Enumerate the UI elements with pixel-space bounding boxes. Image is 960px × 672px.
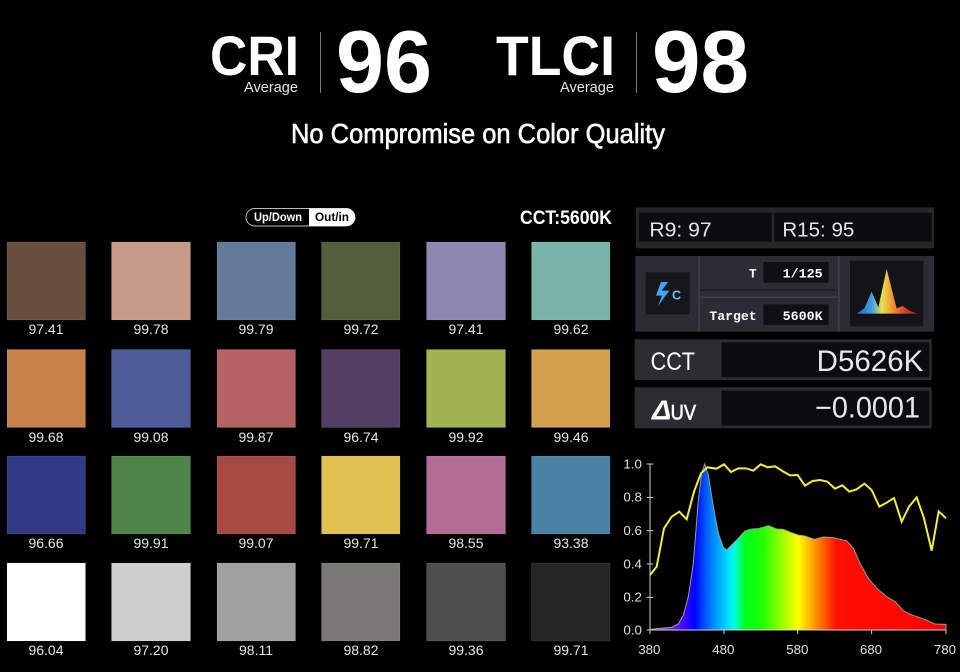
panel: delta uv reading: Δ — [651, 394, 671, 425]
value row 3: 99.07 — [238, 535, 274, 551]
shutter readout — [749, 262, 829, 283]
value row 2: 99.87 — [238, 429, 274, 445]
x axis labels: 480 — [712, 642, 734, 657]
panel: CCT reading — [635, 339, 932, 380]
value row 2: 99.46 — [553, 429, 589, 445]
swatch row 3 — [7, 456, 610, 534]
x axis labels: 380 — [638, 642, 660, 657]
target readout: Target — [709, 309, 757, 324]
value row 1: 99.78 — [133, 321, 169, 337]
panel: R9 and R15 readout — [636, 207, 934, 248]
CRI value: 96 — [336, 12, 432, 111]
value row 4: 98.82 — [343, 642, 379, 658]
y axis labels: 0.2 — [623, 590, 642, 605]
panel: camera settings — [635, 256, 934, 332]
CRI divider — [320, 32, 321, 93]
value row 2: 96.74 — [343, 429, 379, 445]
toggle: Up/Down Out/in: Up/Down — [254, 212, 302, 224]
value row 3: 99.91 — [133, 535, 169, 551]
value row 4: 98.11 — [239, 642, 273, 658]
panel: CCT reading: CCT — [651, 348, 695, 376]
value row 2: 99.08 — [133, 429, 169, 445]
x axis labels — [638, 642, 956, 657]
shutter readout: 1/125 — [783, 267, 823, 282]
value row 4: 99.36 — [448, 642, 484, 658]
value row 2 — [28, 429, 589, 445]
value row 4: 96.04 — [28, 642, 64, 658]
y axis labels: 1.0 — [623, 456, 642, 471]
value row 3: 99.71 — [343, 535, 379, 551]
TLCI divider — [636, 32, 637, 93]
spectrum chart — [623, 456, 956, 657]
value row 2: 99.92 — [448, 429, 484, 445]
panel: CCT reading: D5626K — [817, 345, 924, 378]
y axis labels: 0.8 — [623, 490, 642, 505]
toggle: Up/Down Out/in — [246, 208, 355, 226]
panel: delta uv reading: −0.0001 — [815, 392, 920, 425]
value row 1: 97.41 — [448, 321, 484, 337]
y axis labels: 0.4 — [623, 556, 642, 571]
TLCI value: 98 — [652, 12, 749, 111]
value row 3: 98.55 — [448, 535, 484, 551]
spectral power area — [650, 464, 946, 630]
y axis labels: 0.6 — [623, 523, 642, 538]
x axis labels: 680 — [860, 642, 882, 657]
value row 3 — [28, 535, 589, 551]
TLCI average caption: Average — [560, 79, 614, 96]
panel: R9 and R15 readout: R9: 97 — [649, 219, 712, 242]
x axis labels: 580 — [786, 642, 808, 657]
panel: delta uv reading — [635, 387, 932, 428]
value row 1: 99.72 — [343, 321, 379, 337]
subtitle: No Compromise on Color Quality — [291, 118, 665, 149]
swatch row 4 — [7, 563, 610, 641]
y axis labels — [623, 456, 642, 637]
target readout — [709, 304, 829, 325]
value row 3: 93.38 — [553, 535, 589, 551]
value row 4: 97.20 — [133, 642, 169, 658]
swatch row 1 — [7, 242, 610, 320]
x axis labels: 780 — [934, 642, 956, 657]
yellow reflectance line — [650, 464, 946, 575]
CCT heading: CCT:5600K — [520, 208, 612, 229]
color swatch grid — [7, 242, 610, 658]
axes — [647, 464, 946, 634]
value row 1: 97.41 — [28, 321, 64, 337]
target readout: 5600K — [783, 309, 823, 324]
panel: R9 and R15 readout: R15: 95 — [782, 219, 854, 242]
meter panels — [635, 207, 934, 428]
TLCI label: TLCI — [496, 24, 615, 87]
panel: delta uv reading: UV — [671, 400, 697, 424]
shutter readout: T — [749, 267, 757, 282]
value row 2: 99.68 — [28, 429, 64, 445]
CRI label: CRI — [210, 24, 299, 87]
value row 4 — [28, 642, 589, 658]
header: CRI and TLCI scores — [210, 12, 749, 111]
value row 4: 99.71 — [553, 642, 589, 658]
icon: flash mode — [646, 272, 690, 314]
value row 1 — [28, 321, 589, 337]
value row 1: 99.62 — [553, 321, 589, 337]
icon: flash mode: C — [672, 288, 681, 302]
y axis labels: 0.0 — [623, 622, 642, 637]
value row 1: 99.79 — [238, 321, 274, 337]
icon: mini spectrum — [850, 261, 923, 326]
value row 3: 96.66 — [28, 535, 64, 551]
swatch row 2 — [7, 350, 610, 428]
toggle: Up/Down Out/in: Out/in — [315, 212, 349, 224]
CRI average caption: Average — [244, 79, 298, 96]
